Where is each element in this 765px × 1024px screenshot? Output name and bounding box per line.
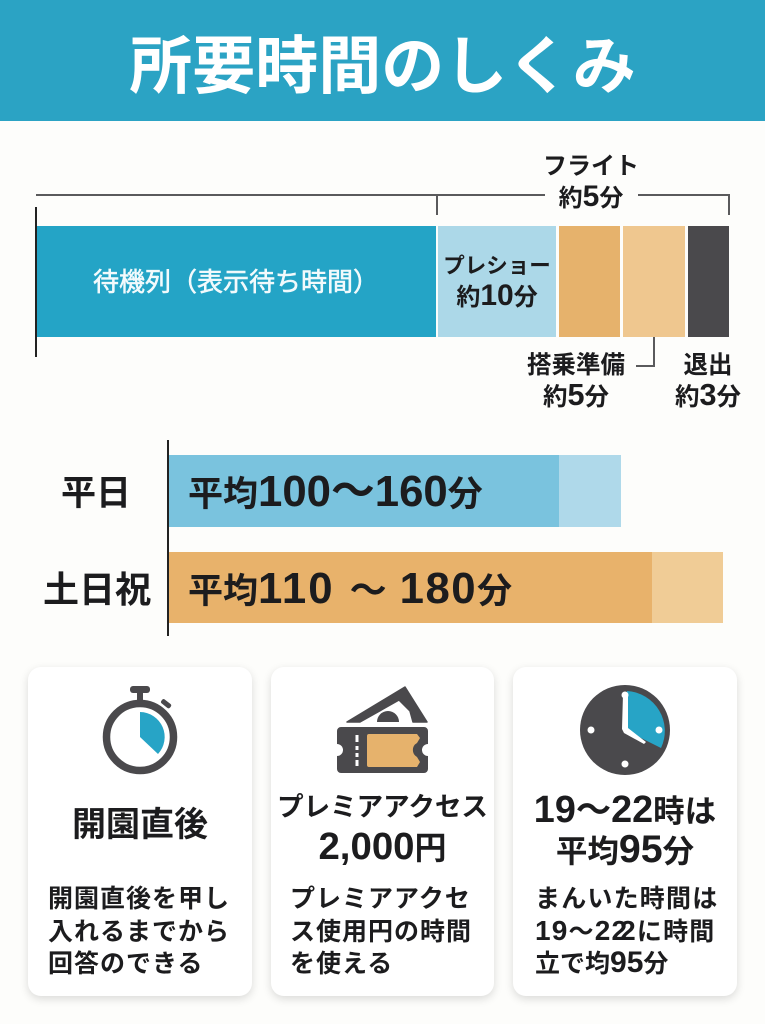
card: right after opening [28, 667, 252, 996]
label: pre-show: プレショー [443, 254, 551, 278]
label: flight: 約5分 [559, 180, 623, 213]
timeline breakdown chart [35, 153, 741, 412]
card body text: 開園直後を甲し [48, 885, 230, 913]
label: queue: 待機列（表示待ち時間） [93, 267, 379, 297]
label: pre-show [443, 254, 551, 312]
label: exit [675, 352, 741, 412]
segment: pre-show [438, 226, 556, 337]
card body text: 立で均95分 [535, 946, 668, 979]
icon: ticket with banknote [337, 686, 428, 773]
segment: boarding dark orange [559, 226, 620, 337]
bracket line [36, 194, 730, 215]
weekday bar [169, 455, 621, 527]
segment: exit [688, 226, 729, 337]
card body text [535, 885, 718, 979]
card heading [534, 789, 716, 871]
label: boarding: 搭乗準備 [527, 352, 625, 379]
icon: stopwatch [102, 686, 178, 774]
label: pre-show: 約10分 [456, 279, 538, 312]
card body text [48, 885, 230, 978]
card price: 2,000円 [318, 825, 447, 868]
segment: boarding light orange [623, 226, 685, 337]
header banner [0, 0, 765, 121]
card body text: を使える [290, 950, 393, 978]
weekend value: 平均110 ～ 180分 [188, 564, 512, 613]
label: exit: 約3分 [675, 378, 741, 412]
label: flight: フライト [543, 153, 639, 180]
label: boarding [527, 352, 625, 412]
row label: weekends and holidays: 土日祝 [43, 569, 151, 610]
segment: queue [36, 226, 436, 337]
card: premier access [271, 667, 494, 996]
card heading: 開園直後 [72, 806, 208, 844]
connector: boarding [636, 337, 655, 367]
label: exit: 退出 [684, 352, 732, 379]
card heading: プレミアアクセス [277, 792, 488, 822]
card body text: プレミアアクセ [290, 885, 471, 913]
left axis line [35, 207, 37, 357]
card body text [290, 885, 472, 978]
card: 19 to 22 o'clock [513, 667, 737, 996]
card body text: 19～222に時間 [535, 914, 716, 946]
card heading: 19～22時は [534, 789, 716, 831]
weekday value: 平均100～160分 [188, 467, 483, 516]
card body text: 入れるまでから [48, 918, 230, 946]
vertical axis [167, 440, 169, 636]
weekend average range [169, 552, 652, 623]
icon: clock [580, 685, 670, 775]
card body text: まんいた時間は [535, 885, 718, 913]
card heading: 平均95分 [556, 827, 694, 871]
card body text: 回答のできる [48, 950, 204, 978]
weekend bar [169, 552, 723, 623]
row label: weekdays: 平日 [61, 474, 131, 513]
weekday average range [169, 455, 559, 527]
card body text: ス使用円の時間 [290, 918, 472, 946]
segment bar: total time [37, 226, 729, 337]
average time bar chart [43, 440, 723, 636]
label: flight [543, 153, 639, 213]
title: 所要時間のしくみ [129, 32, 636, 102]
label: boarding: 約5分 [543, 378, 609, 412]
